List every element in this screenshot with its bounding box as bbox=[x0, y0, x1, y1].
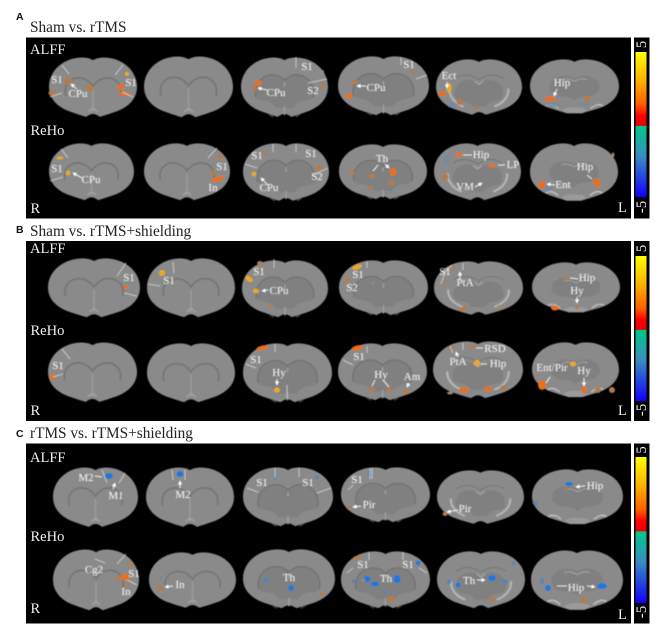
B ReHo slice 6: Hy bbox=[577, 365, 591, 377]
A ALFF slice 1 bbox=[48, 57, 137, 117]
A ReHo slice 3: CPu bbox=[260, 182, 279, 194]
C ReHo slice 1 bbox=[53, 549, 140, 610]
C ALFF slice 3 bbox=[243, 467, 333, 526]
C ReHo slice 6 bbox=[531, 550, 623, 610]
colour bar panel A bbox=[634, 38, 650, 218]
colour bar panel B bbox=[634, 241, 650, 421]
B ALFF slice 3: CPu bbox=[270, 285, 289, 297]
B ALFF slice 3 bbox=[242, 259, 328, 317]
B ReHo slice 4 bbox=[338, 343, 427, 400]
C ALFF slice 5: Pir bbox=[459, 503, 472, 515]
B ReHo slice 4: S1 bbox=[353, 351, 365, 363]
C ReHo slice 4: S1 bbox=[402, 559, 414, 571]
row labels panel B: ALFF bbox=[30, 241, 65, 257]
C ALFF slice 3: S1 bbox=[256, 477, 268, 489]
C ALFF slice 4 bbox=[341, 467, 430, 522]
A ReHo slice 4 bbox=[339, 144, 427, 199]
B ALFF slice 1 bbox=[48, 258, 140, 317]
C ALFF slice 3: S1 bbox=[302, 477, 314, 489]
C ALFF slice 4: Pir bbox=[363, 499, 376, 511]
A ReHo slice 3: S1 bbox=[251, 150, 263, 162]
A ReHo slice 2: In bbox=[208, 182, 218, 194]
A ReHo slice 5 bbox=[434, 143, 521, 200]
C ReHo slice 2: In bbox=[175, 579, 185, 591]
panel B: black imaging background bbox=[26, 241, 631, 421]
B ReHo slice 5 bbox=[433, 341, 523, 398]
B ReHo slice 6: Ent/Pir bbox=[536, 362, 568, 374]
B ReHo slice 3 bbox=[243, 343, 332, 402]
B ReHo slice 5: PtA bbox=[449, 356, 467, 368]
row labels panel C: R bbox=[30, 601, 40, 617]
B ReHo slice 5: RSD bbox=[484, 343, 506, 355]
B ALFF slice 4: S1 bbox=[352, 269, 364, 281]
A ReHo slice 1: S1 bbox=[51, 163, 63, 175]
B ReHo slice 1: S1 bbox=[52, 360, 64, 372]
A ALFF slice 1: CPu bbox=[69, 88, 88, 100]
panel A: black imaging background bbox=[26, 38, 631, 218]
C ALFF slice 2 bbox=[146, 467, 234, 527]
B ALFF slice 1: S1 bbox=[123, 272, 135, 284]
A ReHo slice 5: Hip bbox=[473, 149, 490, 161]
colour bar panel C bbox=[634, 444, 650, 624]
row labels panel B: ReHo bbox=[30, 323, 64, 339]
A ReHo slice 6: Ent bbox=[555, 179, 571, 191]
B ReHo slice 3: Hy bbox=[272, 367, 286, 379]
heading: Sham vs. rTMS: Sham vs. rTMS bbox=[30, 19, 126, 36]
A ALFF slice 2 bbox=[144, 56, 233, 117]
C ALFF slice 6: Hip bbox=[587, 480, 604, 492]
panel C brain slices bbox=[53, 467, 623, 610]
C ReHo slice 4 bbox=[341, 551, 430, 608]
B ALFF slice 5: S1 bbox=[439, 266, 451, 278]
A ReHo slice 6: Hip bbox=[577, 161, 594, 173]
B ALFF slice 6: Hip bbox=[579, 272, 596, 284]
C ReHo slice 3: Th bbox=[283, 572, 296, 584]
A ReHo slice 1: CPu bbox=[82, 174, 101, 186]
C ALFF slice 1: M1 bbox=[108, 490, 124, 502]
B ReHo slice 4: Hy bbox=[374, 369, 388, 381]
row labels panel A: ReHo bbox=[30, 123, 64, 139]
B ALFF slice 5 bbox=[434, 261, 523, 315]
C ALFF slice 1: M2 bbox=[78, 472, 94, 484]
B ALFF slice 5: PtA bbox=[456, 277, 474, 289]
A ReHo slice 2: S1 bbox=[216, 161, 228, 173]
row labels panel C: ALFF bbox=[30, 450, 65, 466]
C ALFF slice 6 bbox=[532, 469, 623, 524]
B ReHo slice 5: Hip bbox=[490, 358, 507, 370]
C ALFF slice 4: S1 bbox=[351, 474, 363, 486]
row labels panel B: L bbox=[618, 403, 627, 419]
row labels panel B bbox=[30, 241, 627, 419]
C ReHo slice 1: In bbox=[121, 586, 131, 598]
heading: Sham vs. rTMS+shielding: Sham vs. rTMS+shielding bbox=[30, 223, 192, 240]
B ALFF slice 6 bbox=[532, 262, 620, 312]
colour bar panel C: -5 bbox=[634, 606, 650, 618]
heading: rTMS vs. rTMS+shielding: rTMS vs. rTMS+shielding bbox=[30, 425, 193, 442]
A ALFF slice 1: S1 bbox=[125, 77, 137, 89]
A ALFF slice 5 bbox=[436, 59, 522, 115]
B ReHo slice 6 bbox=[532, 342, 619, 397]
colour bar panel A: 5 bbox=[634, 41, 650, 48]
B ReHo slice 4: Am bbox=[404, 371, 421, 383]
A ReHo slice 4: Th bbox=[376, 153, 389, 165]
panel A brain slices bbox=[48, 56, 619, 201]
A ALFF slice 4 bbox=[338, 56, 429, 115]
B ALFF slice 2: S1 bbox=[163, 275, 175, 287]
B ALFF slice 4: S2 bbox=[346, 282, 358, 294]
B ALFF slice 6: Hy bbox=[570, 285, 584, 297]
A ALFF slice 6 bbox=[530, 59, 619, 113]
A ALFF slice 4: S1 bbox=[403, 59, 415, 71]
A ReHo slice 3: S2 bbox=[311, 171, 323, 183]
C ALFF slice 1 bbox=[53, 467, 138, 527]
A ReHo slice 1 bbox=[49, 143, 134, 200]
row labels panel C: ReHo bbox=[30, 529, 64, 545]
A ALFF slice 1: S1 bbox=[51, 74, 63, 86]
row labels panel C bbox=[30, 450, 627, 623]
B ALFF slice 2 bbox=[147, 258, 235, 317]
A ALFF slice 3 bbox=[241, 57, 328, 117]
A ReHo slice 5: LP bbox=[507, 159, 519, 171]
row labels panel A: R bbox=[30, 201, 40, 217]
A ReHo slice 3 bbox=[243, 143, 329, 201]
C ReHo slice 1: S1 bbox=[128, 568, 140, 580]
A ALFF slice 4: CPu bbox=[367, 82, 386, 94]
panel B brain slices bbox=[48, 258, 620, 402]
colour bar panel B: -5 bbox=[634, 404, 650, 416]
C ReHo slice 3 bbox=[243, 549, 335, 608]
C ReHo slice 4: Th bbox=[380, 573, 393, 585]
colour bar panel C: 5 bbox=[634, 446, 650, 454]
row labels panel B: R bbox=[30, 403, 40, 419]
A ALFF slice 6: Hip bbox=[554, 77, 571, 89]
B ReHo slice 1 bbox=[48, 342, 137, 402]
C ALFF slice 2: M2 bbox=[175, 489, 191, 501]
C ReHo slice 1: Cg2 bbox=[85, 564, 103, 576]
panel label A: A bbox=[16, 11, 24, 23]
A ALFF slice 3: S2 bbox=[307, 85, 319, 97]
C ReHo slice 6: Hip bbox=[568, 582, 585, 594]
C ReHo slice 5 bbox=[437, 551, 525, 608]
B ALFF slice 4 bbox=[339, 260, 428, 315]
B ReHo slice 2 bbox=[147, 343, 235, 402]
row labels panel C: L bbox=[618, 607, 627, 623]
row labels panel A: L bbox=[618, 200, 627, 216]
row labels panel A: ALFF bbox=[30, 42, 65, 58]
row labels panel A bbox=[30, 42, 627, 217]
A ReHo slice 5: VM bbox=[456, 181, 474, 193]
C ReHo slice 2 bbox=[149, 552, 236, 608]
B ALFF slice 3: S1 bbox=[253, 266, 265, 278]
A ReHo slice 6 bbox=[530, 143, 618, 201]
A ALFF slice 3: S1 bbox=[301, 61, 313, 73]
colour bar panel A: -5 bbox=[634, 201, 650, 213]
panel C: black imaging background bbox=[26, 444, 631, 624]
colour bar panel B: 5 bbox=[634, 245, 650, 252]
panel B label: B bbox=[16, 224, 24, 236]
A ReHo slice 3: S1 bbox=[305, 148, 317, 160]
A ALFF slice 5: Ect bbox=[442, 70, 456, 82]
C ReHo slice 4: S1 bbox=[357, 559, 369, 571]
A ALFF slice 3: CPu bbox=[267, 87, 286, 99]
A ReHo slice 2 bbox=[144, 143, 230, 200]
panel C label: C bbox=[16, 428, 24, 440]
B ReHo slice 3: S1 bbox=[250, 354, 262, 366]
C ReHo slice 5: Th bbox=[463, 575, 476, 587]
C ALFF slice 5 bbox=[437, 470, 524, 524]
